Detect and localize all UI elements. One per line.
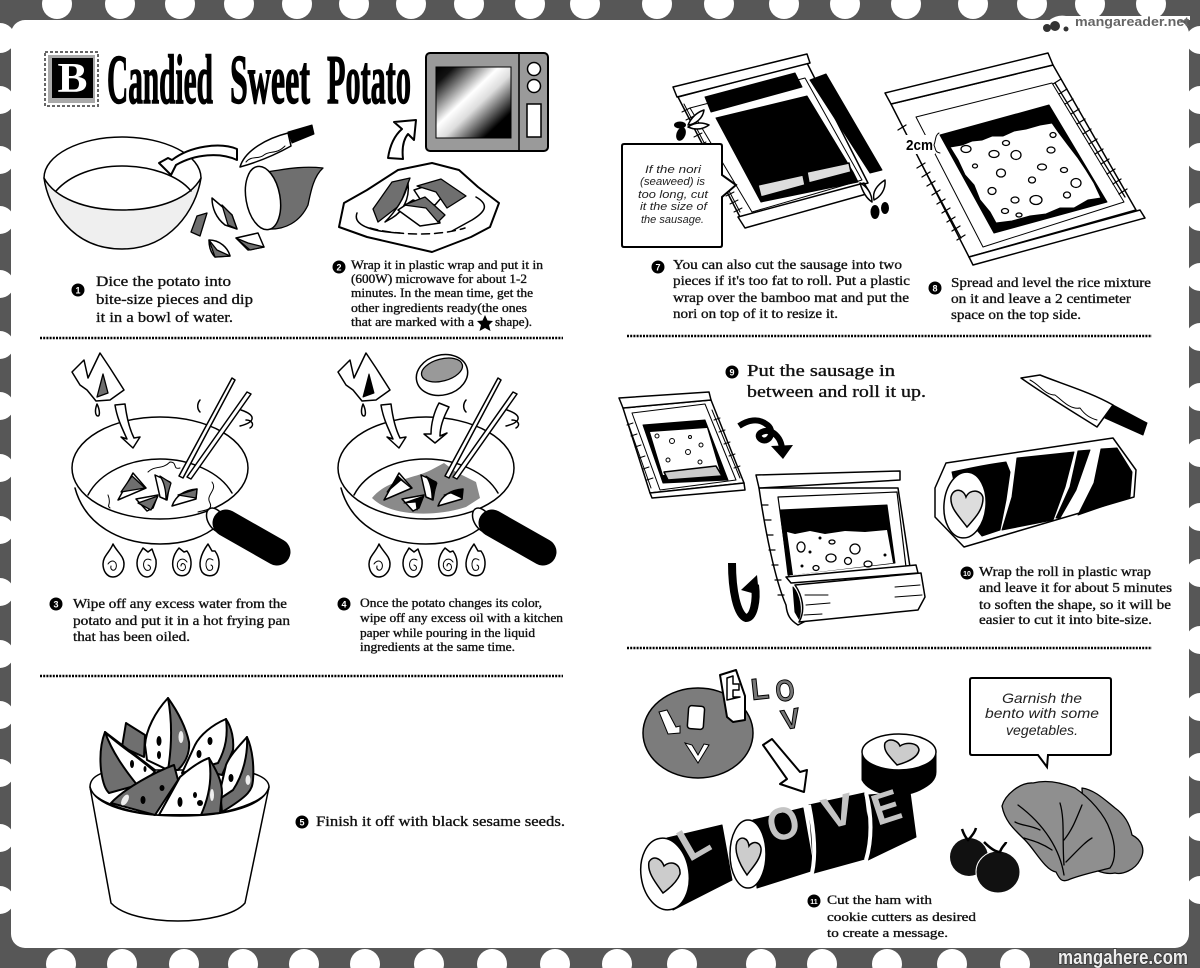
step 3 text: potato and put it in a hot frying pan — [73, 614, 290, 629]
title: Candied — [107, 42, 213, 119]
label: 2 cm — [904, 133, 940, 154]
step 7 text: pieces if it's too fat to roll. Put a plastic — [673, 274, 910, 289]
step 9 text: 9 — [729, 368, 735, 378]
illustration: LOVE sushi rolls: V — [817, 784, 861, 840]
callout: nori note: it the size of — [640, 201, 708, 213]
step 4 text: ingredients at the same time. — [360, 640, 515, 654]
step 1 text: 1 — [75, 286, 81, 296]
watermark: mangareader: mangareader.net — [1075, 14, 1190, 29]
text: Potato — [327, 42, 411, 119]
step 3 text: that has been oiled. — [73, 630, 190, 645]
step 11 text: Cut the ham with — [827, 892, 933, 907]
watermark: mangareader — [1043, 14, 1190, 33]
step 4 text — [338, 596, 564, 654]
callout: garnish: vegetables. — [1006, 722, 1078, 738]
step 2 text: 2 — [336, 262, 342, 272]
illustration: cup of candied potato — [90, 698, 269, 921]
step 10 text — [960, 564, 1172, 627]
callout: garnish — [970, 678, 1111, 767]
step 9 text: between and roll it up. — [747, 382, 926, 401]
label: 2 cm: 2cm — [906, 137, 933, 154]
divider — [40, 675, 563, 677]
step 3 text: 3 — [53, 600, 59, 610]
step 2 text: shape). — [495, 315, 532, 329]
step 7 text: nori on top of it to resize it. — [673, 307, 838, 322]
icon: burner flames step 3 — [103, 544, 219, 577]
step 2 text: that are marked with a — [351, 315, 474, 329]
step 8 text — [928, 276, 1151, 323]
step 7 text: You can also cut the sausage into two — [673, 258, 902, 273]
divider — [40, 337, 563, 339]
icon: kitchen knife — [240, 125, 314, 167]
step 2 text: other ingredients ready(the ones — [351, 301, 527, 315]
arrow: to microwave — [388, 120, 416, 159]
step 1 text: it in a bowl of water. — [96, 310, 233, 326]
step 8 text: on it and leave a 2 centimeter — [951, 292, 1131, 307]
step 9 text — [726, 361, 926, 401]
step 4 text: Once the potato changes its color, — [360, 596, 542, 610]
step 2 text: Wrap it in plastic wrap and put it in — [351, 258, 544, 272]
step 9 text: Put the sausage in — [747, 361, 896, 380]
step 10 text: 10 — [963, 571, 971, 578]
callout: garnish: bento with some — [985, 705, 1099, 721]
step 1 text: Dice the potato into — [96, 274, 231, 290]
callout: nori note — [622, 144, 736, 247]
callout: nori note: (seaweed) is — [640, 176, 706, 188]
step 10 text: to soften the shape, so it will be — [979, 597, 1171, 612]
illustration: ham disc with letters: O — [773, 674, 797, 709]
callout: nori note: too long, cut — [638, 189, 709, 201]
step 8 text: Spread and level the rice mixture — [951, 276, 1151, 291]
illustration: ham disc with letters: V — [779, 702, 803, 736]
step 11 text: cookie cutters as desired — [827, 909, 977, 924]
arrow: down to roll — [763, 739, 807, 792]
illustration: wrapped potato on plate — [339, 163, 499, 252]
step 3 text: Wipe off any excess water from the — [73, 597, 287, 612]
icon: scissors left — [674, 110, 709, 142]
divider — [627, 335, 1152, 337]
title: Sweet — [230, 42, 310, 119]
illustration: LOVE sushi rolls — [636, 734, 936, 913]
step 10 text: and leave it for about 5 minutes — [979, 580, 1172, 595]
step 1 text — [72, 274, 253, 326]
step 4 text: 4 — [341, 600, 347, 610]
step 7 text: 7 — [655, 262, 661, 272]
illustration: sweet potato and chunks — [191, 164, 323, 257]
step 4 text: paper while pouring in the liquid — [360, 626, 536, 640]
step 4 text: wipe off any excess oil with a kitchen — [360, 611, 564, 625]
illustration: ham disc with letters — [643, 670, 803, 778]
illustration: bamboo mat with nori cut — [673, 54, 882, 228]
step 11 text: 11 — [810, 899, 818, 906]
arrow: curved black U — [732, 563, 759, 618]
step 10 text: Wrap the roll in plastic wrap — [979, 564, 1151, 579]
icon: microwave — [426, 53, 548, 151]
illustration: bowl of water — [44, 137, 201, 249]
illustration: bamboo mat with rice — [885, 53, 1145, 265]
step 2 text: minutes. In the mean time, get the — [351, 286, 533, 300]
step 11 text — [808, 892, 977, 940]
illustration: LOVE sushi rolls: O — [761, 794, 805, 853]
icon: burner flames step 4 — [369, 544, 485, 577]
illustration: mat rolling up — [756, 471, 925, 625]
step 5 text: Finish it off with black sesame seeds. — [316, 814, 565, 830]
step 3 text — [50, 597, 290, 645]
step 2 text: (600W) microwave for about 1-2 — [351, 272, 527, 286]
icon: scissors right — [860, 180, 889, 219]
step 1 text: bite-size pieces and dip — [96, 292, 253, 308]
callout: garnish: Garnish the — [1002, 690, 1082, 706]
step 7 text — [652, 258, 910, 322]
callout: nori note: If the nori — [645, 164, 702, 176]
arrow: curly black rolling — [739, 420, 793, 459]
illustration: small mat with sausage — [619, 392, 745, 498]
illustration: LOVE sushi rolls: E — [866, 780, 907, 835]
step 10 text: easier to cut it into bite-size. — [979, 612, 1152, 627]
step 5 text: 5 — [299, 818, 305, 828]
arrow: potato into bowl — [159, 146, 237, 175]
badge: letter B stamp — [45, 52, 98, 106]
illustration: LOVE sushi rolls: L — [668, 812, 719, 871]
divider — [627, 647, 1152, 649]
illustration: frying pan step 4 — [338, 349, 543, 552]
icon: knife over roll — [1021, 375, 1147, 435]
step 8 text: space on the top side. — [951, 308, 1081, 323]
step 2 text — [332, 258, 544, 331]
callout: nori note: the sausage. — [641, 214, 704, 226]
step 8 text: 8 — [932, 284, 938, 294]
step 11 text: to create a message. — [827, 925, 948, 940]
badge: letter B stamp: B — [58, 56, 88, 102]
step 7 text: wrap over the bamboo mat and put the — [673, 291, 909, 306]
illustration: cherry tomatoes — [950, 828, 1020, 893]
illustration: nori roll with heart — [935, 438, 1136, 547]
illustration: ham disc with letters: L — [749, 672, 771, 707]
illustration: frying pan step 3 — [72, 353, 277, 552]
illustration: lettuce — [1002, 782, 1143, 881]
